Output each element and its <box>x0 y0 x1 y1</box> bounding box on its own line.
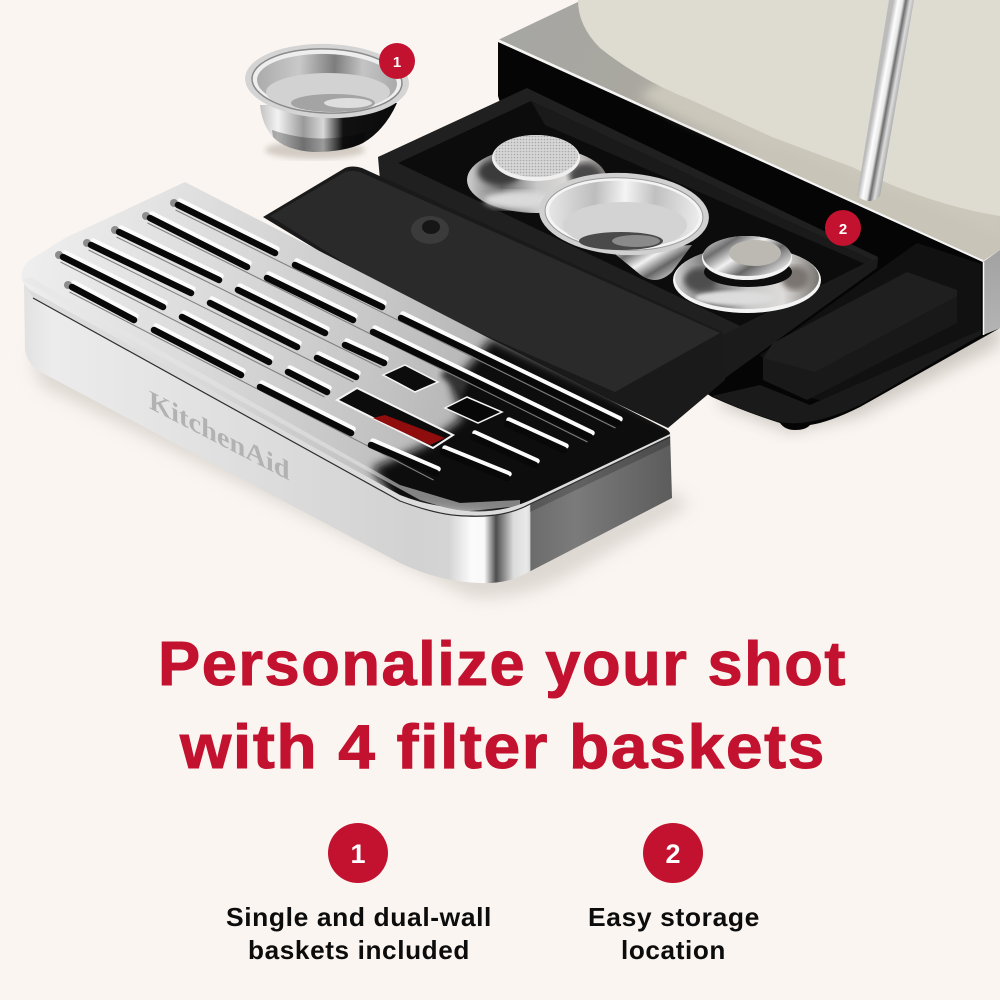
cream housing <box>578 0 1000 216</box>
open basket bowl <box>610 245 692 280</box>
feature 1 number: 1 <box>350 839 366 869</box>
drawer lid panel <box>263 166 725 428</box>
open basket rim <box>537 169 711 259</box>
lid drain hole <box>411 216 449 244</box>
stored basket open <box>537 169 711 280</box>
tray top surface <box>22 182 670 511</box>
slot end caps <box>55 199 178 289</box>
bin front wall <box>723 258 878 378</box>
title: Personalize your shot <box>158 630 847 699</box>
cap top <box>702 236 792 280</box>
cap basket plate <box>673 247 821 313</box>
feature 1 text <box>226 902 492 965</box>
stainless base plate <box>498 0 1000 261</box>
tray right side shading <box>530 432 670 512</box>
badge 1 <box>379 43 415 79</box>
recess wall <box>760 243 981 408</box>
feature 2 <box>588 823 760 965</box>
silver right edge <box>983 250 1000 335</box>
drip tray <box>22 182 690 598</box>
lower drawer foot <box>712 330 981 423</box>
basket rim <box>244 41 410 121</box>
tray shadow <box>30 350 690 598</box>
badge 2 <box>825 210 861 246</box>
title <box>158 630 847 782</box>
red indicator window <box>337 388 453 448</box>
chrome reflection <box>220 336 670 512</box>
feature 2 text: Easy storage <box>588 902 760 932</box>
tray rim band <box>24 282 670 516</box>
cap dark ring <box>704 257 792 287</box>
basket storage bin <box>378 88 878 378</box>
badge 1: 1 <box>393 54 401 71</box>
slot highlights <box>65 201 620 474</box>
cream housing reflection <box>640 60 1000 235</box>
espresso machine body <box>498 0 1000 432</box>
square openings <box>383 365 438 392</box>
machine under-base shadow <box>720 320 1000 432</box>
stored basket with cap <box>673 236 821 313</box>
drain slots <box>63 205 618 478</box>
steam wand <box>857 0 914 201</box>
basket bowl <box>260 103 397 152</box>
KitchenAid logo: KitchenAid <box>149 384 290 487</box>
feature 1 <box>226 823 492 965</box>
feature 1 number <box>328 823 388 883</box>
feature 1 text: baskets included <box>248 935 470 965</box>
feature 2 text: location <box>621 935 726 965</box>
slot channels <box>60 210 616 480</box>
drawer handle <box>763 272 957 400</box>
feature 1 text: Single and dual-wall <box>226 902 492 932</box>
feature 2 number <box>643 823 703 883</box>
floating filter basket <box>244 41 410 159</box>
badge 2: 2 <box>839 221 847 238</box>
feature 2 number: 2 <box>665 839 681 869</box>
basket shadow <box>265 141 365 159</box>
black machine front <box>498 42 1000 430</box>
feature 2 text <box>588 902 760 965</box>
tray side <box>24 280 672 583</box>
stored basket with mesh disc <box>467 135 607 213</box>
title: with 4 filter baskets <box>179 713 826 782</box>
bin interior <box>398 101 872 326</box>
